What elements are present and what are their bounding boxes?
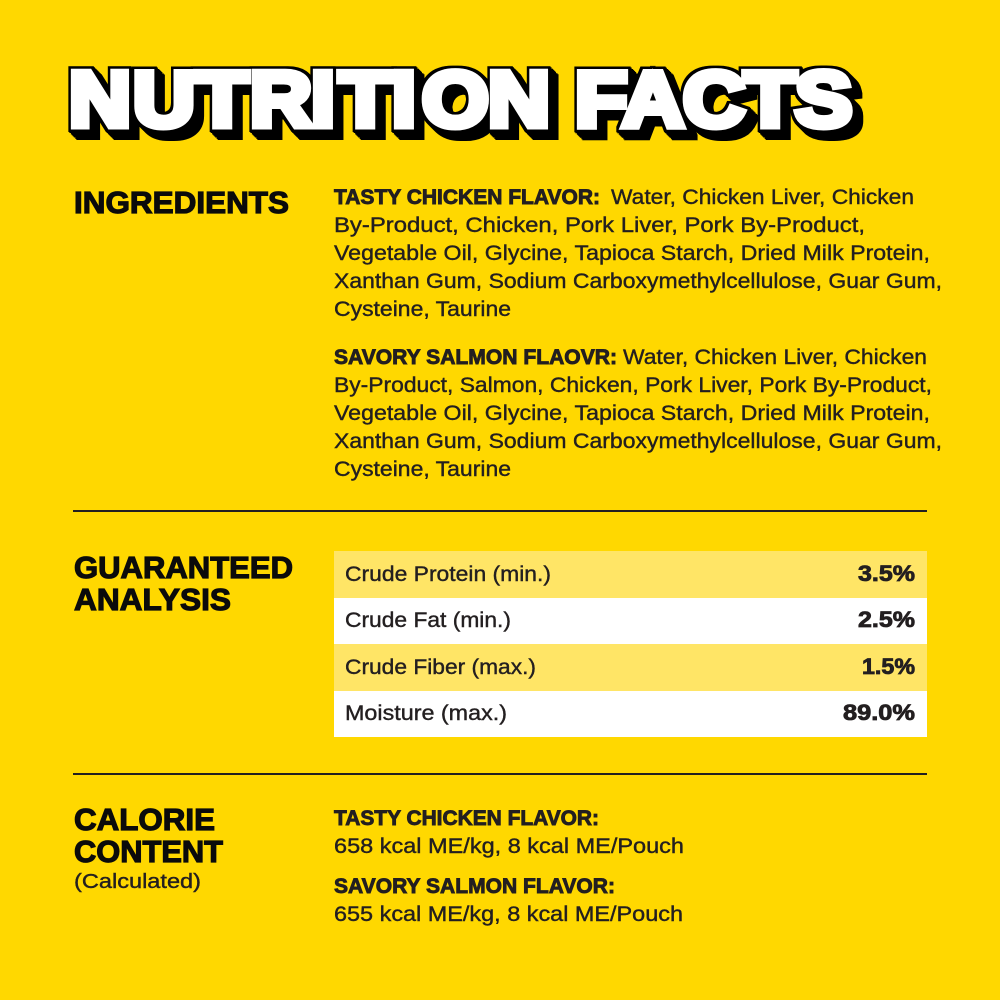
salmon flavor ingredients: Xanthan Gum, Sodium Carboxymethylcellulose, Guar Gum, [334,430,942,453]
heading: calorie content: CALORIE [74,802,215,837]
row: crude protein: Crude Protein (min.) [345,563,551,586]
text block: ingredients list [334,186,942,481]
heading: guaranteed analysis [74,550,293,617]
heading: calorie content: (Calculated) [74,871,201,893]
row: crude fat [334,598,927,644]
chicken flavor ingredients: Cysteine, Taurine [334,298,511,321]
chicken flavor ingredients: By-Product, Chicken, Pork Liver, Pork By-Product, [334,214,865,237]
heading: ingredients: INGREDIENTS [74,185,289,220]
chicken calories: 658 kcal ME/kg, 8 kcal ME/Pouch [334,835,684,858]
heading: calorie content [74,802,223,893]
salmon calories: SAVORY SALMON FLAVOR: [334,875,615,898]
row: crude fiber: 1.5% [862,654,915,679]
row: moisture [334,691,927,737]
chicken calories [334,807,684,858]
row: crude protein: 3.5% [858,561,915,586]
salmon flavor ingredients [334,346,942,481]
salmon flavor ingredients: Cysteine, Taurine [334,458,511,481]
title: NUTRITION FACTS [69,57,852,143]
salmon flavor ingredients: SAVORY SALMON FLAOVR: [334,346,617,369]
chicken flavor ingredients: Water, Chicken Liver, Chicken [611,186,914,209]
salmon flavor ingredients: Vegetable Oil, Glycine, Tapioca Starch, Dried Milk Protein, [334,402,930,425]
salmon calories [334,875,683,926]
chicken flavor ingredients: Xanthan Gum, Sodium Carboxymethylcellulose, Guar Gum, [334,270,942,293]
text block: calorie values [334,807,684,926]
row: moisture: Moisture (max.) [345,702,507,725]
row: crude fat: Crude Fat (min.) [345,609,511,632]
heading: guaranteed analysis: GUARANTEED [74,550,293,585]
chicken calories: TASTY CHICKEN FLAVOR: [334,807,599,830]
row: moisture: 89.0% [843,700,915,725]
salmon flavor ingredients: Water, Chicken Liver, Chicken [623,346,927,369]
chicken flavor ingredients [334,186,942,321]
chicken flavor ingredients: TASTY CHICKEN FLAVOR: [334,186,600,209]
heading: calorie content: CONTENT [74,834,223,869]
chicken flavor ingredients: Vegetable Oil, Glycine, Tapioca Starch, Dried Milk Protein, [334,242,930,265]
row: crude fiber [334,644,927,691]
salmon flavor ingredients: By-Product, Salmon, Chicken, Pork Liver, Pork By-Product, [334,374,932,397]
table: guaranteed analysis [334,551,927,737]
salmon calories: 655 kcal ME/kg, 8 kcal ME/Pouch [334,903,683,926]
row: crude fat: 2.5% [858,607,915,632]
row: crude protein [334,551,927,598]
row: crude fiber: Crude Fiber (max.) [345,656,536,679]
heading: guaranteed analysis: ANALYSIS [74,582,231,617]
